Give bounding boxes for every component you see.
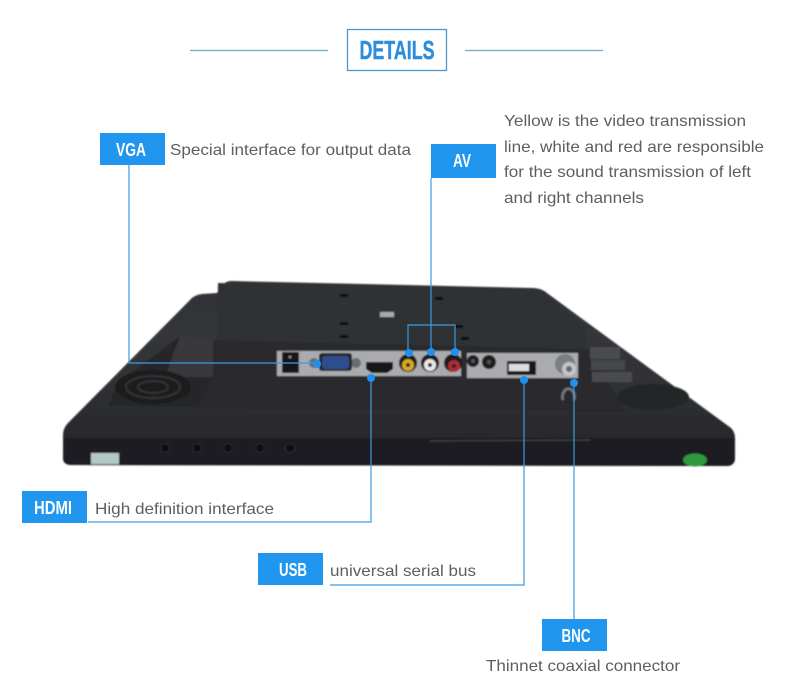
text: BNC description: Thinnet coaxial connector: [486, 658, 681, 675]
text: AV description: line, white and red are responsible: [504, 139, 764, 156]
USB port: [507, 361, 536, 375]
label: AV: [431, 144, 496, 178]
AV white: [421, 354, 439, 372]
front buttons: [160, 444, 294, 452]
connector: USB: [330, 376, 528, 585]
left vent: [108, 336, 213, 407]
text: VGA description: Special interface for output data: [170, 142, 411, 159]
sticker: [91, 453, 119, 464]
green sticker: [683, 454, 707, 466]
text: USB description: universal serial bus: [330, 563, 476, 580]
audio jacks: [467, 355, 496, 369]
label: USB: USB: [279, 560, 307, 580]
label: AV: AV: [453, 151, 471, 171]
connector: AV: [405, 178, 459, 357]
connector: HDMI: [88, 374, 375, 522]
HDMI port: [366, 362, 393, 373]
lower base band: [63, 438, 735, 466]
label: BNC: BNC: [562, 626, 590, 646]
label: USB: [258, 553, 323, 585]
connector: BNC: [570, 379, 578, 620]
monitor photo: [63, 281, 735, 466]
AV yellow: [399, 354, 417, 372]
label: VGA: VGA: [116, 140, 146, 160]
title: DETAILS: [360, 35, 434, 65]
centre recess: [197, 340, 625, 412]
monitor body: [63, 281, 735, 466]
label: HDMI: HDMI: [34, 498, 72, 518]
VGA port: [309, 353, 361, 371]
title: [190, 30, 603, 70]
text: AV description: Yellow is the video transmission: [504, 113, 746, 130]
label: BNC: [542, 619, 607, 651]
connector: VGA: [129, 165, 321, 368]
label: VGA: [100, 133, 165, 165]
AV red: [444, 354, 462, 372]
mounting holes: [340, 294, 469, 340]
text: AV description: for the sound transmission of left: [504, 164, 752, 181]
right vent: [590, 347, 689, 410]
BNC connector: [555, 354, 576, 400]
port plate left: [277, 351, 461, 376]
text: AV description: and right channels: [504, 190, 644, 207]
port plate right: [467, 353, 578, 378]
power socket: [282, 352, 299, 373]
text: HDMI description: High definition interface: [95, 501, 274, 518]
label: HDMI: [22, 491, 87, 523]
text: AV description: [504, 113, 764, 207]
top panel: [217, 283, 588, 349]
